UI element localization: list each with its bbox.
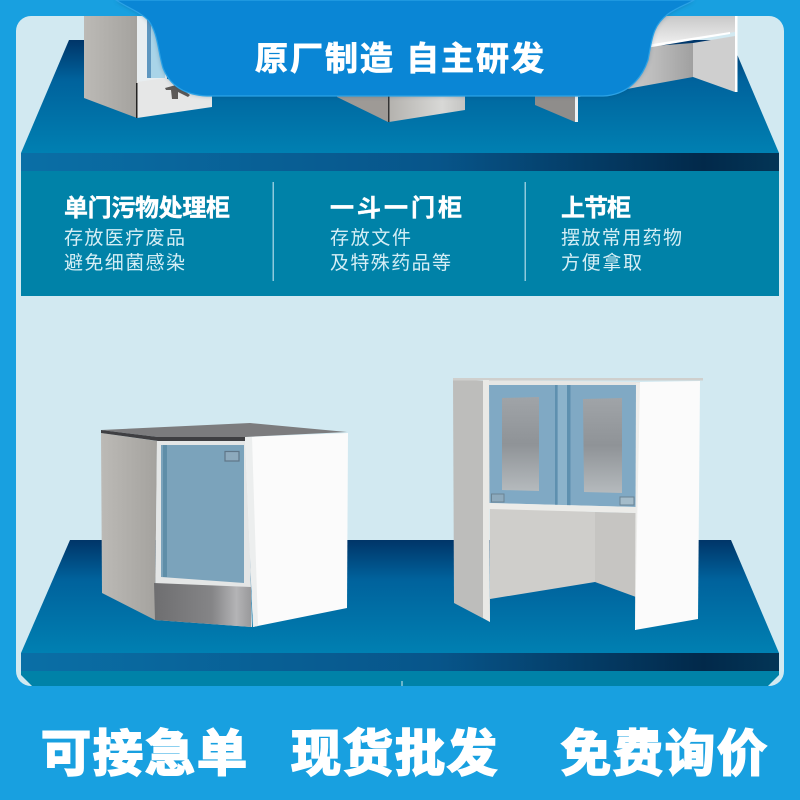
lower floor platform [21, 540, 779, 686]
upper cabinet: left [84, 16, 212, 118]
dark counter top [101, 423, 347, 437]
door handle [165, 85, 190, 99]
column: 一斗一门柜: 及特殊药品等 [330, 252, 451, 274]
upper cabinet: middle [337, 96, 465, 122]
glass door panel [489, 385, 636, 507]
door handle [225, 452, 239, 461]
glass door [161, 445, 244, 583]
upper floor platform [21, 40, 779, 171]
column: 单门污物处理柜: 存放医疗废品 [64, 227, 185, 249]
slogan 1: 可接急单 [41, 726, 247, 782]
column: 上节柜: 上节柜 [561, 195, 631, 222]
title text: 原厂制造 自主研发 [255, 40, 544, 77]
slogan 2: 现货批发 [291, 726, 497, 782]
steel kick plate [154, 583, 251, 627]
cabinet: single door corner cabinet [101, 423, 348, 627]
column: 上节柜: 摆放常用药物 [561, 227, 682, 249]
column: 上节柜: 方便拿取 [561, 251, 642, 274]
open compartment [490, 507, 595, 599]
column: 单门污物处理柜 [64, 195, 230, 274]
column: 上节柜 [561, 195, 682, 274]
banner: top title [116, 0, 694, 96]
footer slogans [41, 726, 767, 782]
slogan 3: 免费询价 [561, 726, 767, 782]
column: 一斗一门柜: 一斗一门柜 [330, 195, 462, 222]
handles [492, 494, 504, 502]
column: 一斗一门柜 [330, 195, 462, 274]
glass window right [583, 398, 622, 493]
glass window left [502, 397, 539, 491]
cabinet: upper unit with two glass doors [453, 378, 703, 630]
column: 一斗一门柜: 存放文件 [330, 227, 411, 249]
info panel: cabinet descriptions [21, 171, 779, 296]
column: 单门污物处理柜: 避免细菌感染 [64, 252, 185, 274]
upper cabinet: right [535, 16, 738, 122]
column: 单门污物处理柜: 单门污物处理柜 [64, 195, 230, 222]
